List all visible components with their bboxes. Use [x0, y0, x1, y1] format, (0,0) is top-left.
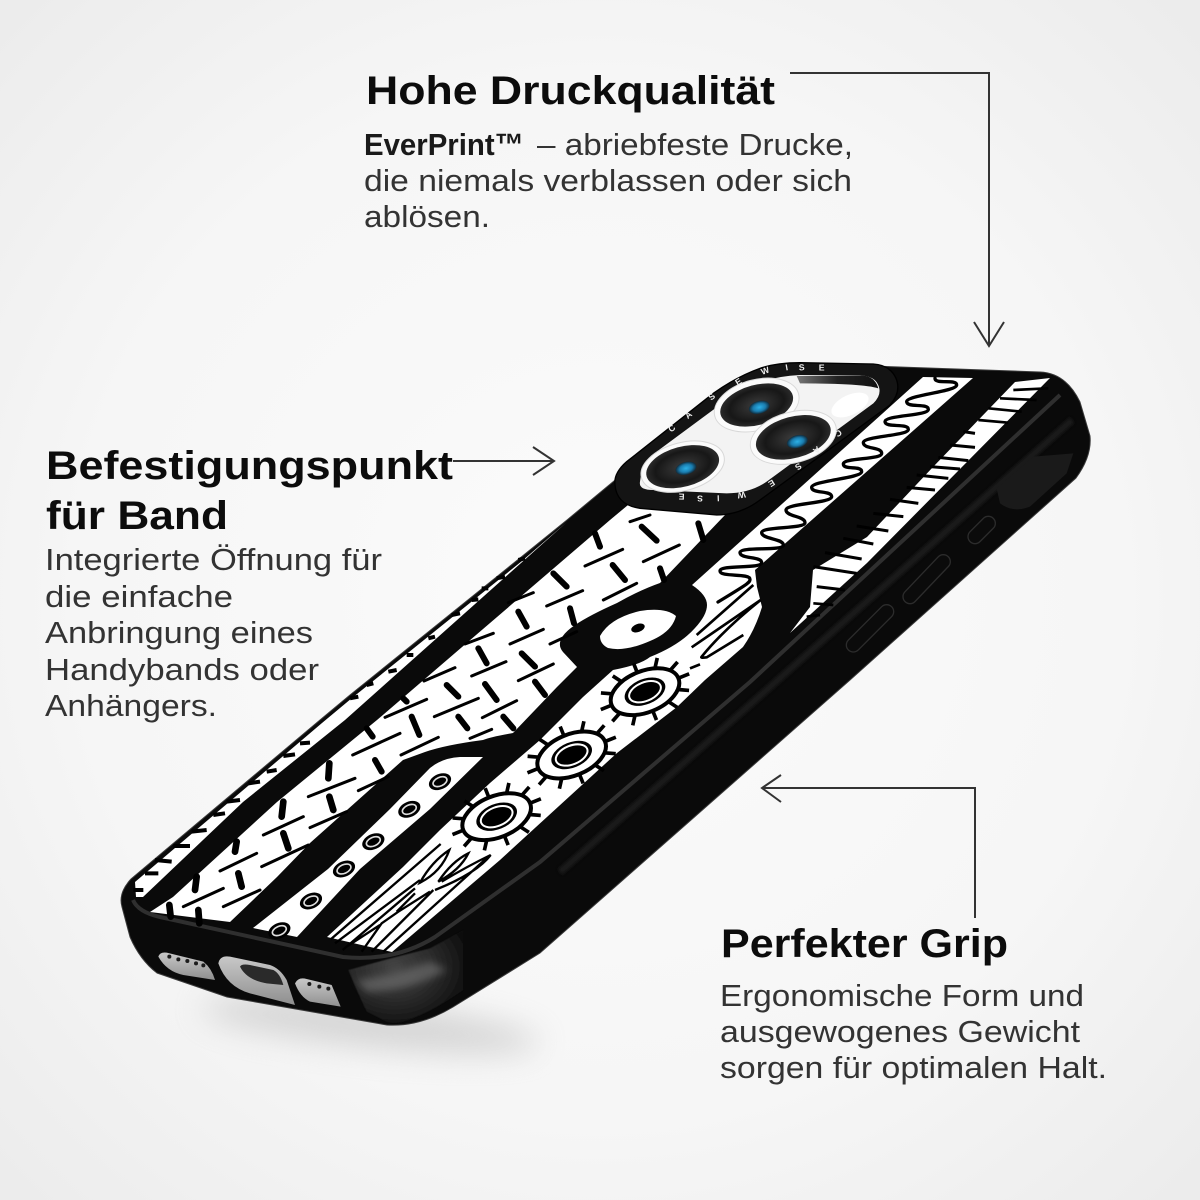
arrow: strap attachment — [453, 447, 554, 475]
lens: top — [708, 369, 805, 441]
bump lettering: E — [819, 362, 825, 372]
body text — [45, 542, 382, 723]
eye — [600, 610, 676, 649]
bump lettering: A — [811, 444, 822, 456]
bump lettering: S — [706, 391, 717, 402]
bump frame — [615, 363, 898, 515]
bump lettering: E — [678, 492, 685, 502]
left hatch ticks — [133, 558, 525, 890]
bump lettering: I — [717, 493, 720, 503]
bump window — [640, 375, 880, 493]
lens: right — [744, 401, 842, 473]
heading: Perfekter Grip — [721, 922, 1008, 966]
bottom ports — [158, 952, 341, 1007]
bump lettering: C — [666, 422, 678, 434]
side buttons — [853, 453, 1073, 645]
dot band — [253, 757, 483, 937]
dots — [266, 770, 454, 942]
arrow: grip — [762, 775, 975, 918]
bump lettering: I — [785, 362, 789, 372]
eye pupil — [630, 622, 646, 634]
heading: Befestigungspunkt — [46, 444, 453, 488]
wave and sun band — [327, 377, 973, 952]
lens: left — [635, 432, 730, 501]
body text — [364, 127, 853, 234]
bump lettering: S — [697, 493, 703, 503]
body text: die einfache — [45, 579, 233, 614]
bump lettering: W — [736, 489, 746, 501]
window highlight — [828, 387, 872, 423]
phone shadow — [199, 985, 541, 1065]
bump lettering: E — [733, 376, 744, 387]
rim line — [133, 395, 1060, 958]
bump lettering: W — [759, 364, 771, 377]
body text: Anbringung eines — [45, 615, 313, 650]
side lines — [560, 420, 1072, 872]
speaker holes — [169, 957, 328, 989]
callout: print quality — [364, 69, 853, 234]
phone case — [121, 362, 1090, 1025]
heading: Hohe Druckqualität — [366, 69, 775, 113]
bump lettering: S — [798, 362, 805, 373]
window top shade — [797, 376, 878, 388]
port: left speaker — [158, 952, 215, 980]
bump lettering: C — [832, 427, 844, 440]
bump lettering: E — [766, 478, 777, 489]
dash pattern — [169, 515, 703, 923]
right hatch ticks — [807, 388, 1048, 617]
body text: sorgen für optimalen Halt. — [720, 1050, 1107, 1085]
body text: Integrierte Öffnung für — [45, 542, 382, 577]
printed face — [135, 377, 1050, 952]
case body — [121, 363, 1090, 1025]
port: charging — [218, 956, 295, 1005]
left hatch band — [135, 522, 567, 897]
wave line — [718, 378, 957, 602]
heading — [46, 444, 453, 538]
bump lettering: S — [793, 461, 804, 473]
port: right speaker — [295, 978, 341, 1007]
right hatch band — [790, 378, 1050, 633]
body text: EverPrint™ — [364, 127, 524, 162]
arrow: print quality — [790, 73, 1004, 346]
suns — [441, 645, 701, 863]
lower zigzag — [331, 844, 491, 952]
upper zigzag — [690, 585, 761, 668]
body text: Ergonomische Form und — [720, 978, 1084, 1013]
body text: die niemals verblassen oder sich — [364, 163, 852, 198]
camera bump — [615, 362, 898, 515]
dash band — [150, 495, 725, 922]
body text: ablösen. — [364, 199, 490, 234]
bump lettering: A — [683, 409, 695, 421]
corner gloss — [348, 930, 463, 1023]
callout: grip — [720, 922, 1107, 1085]
heading: für Band — [46, 494, 228, 538]
bump lettering — [666, 362, 844, 503]
body text: Handybands oder — [45, 652, 319, 687]
body text — [720, 978, 1107, 1085]
body text: ausgewogenes Gewicht — [720, 1014, 1080, 1049]
callout: strap attachment — [45, 444, 453, 723]
body text: Anhängers. — [45, 688, 217, 723]
body text: – abriebfeste Drucke, — [537, 127, 853, 162]
